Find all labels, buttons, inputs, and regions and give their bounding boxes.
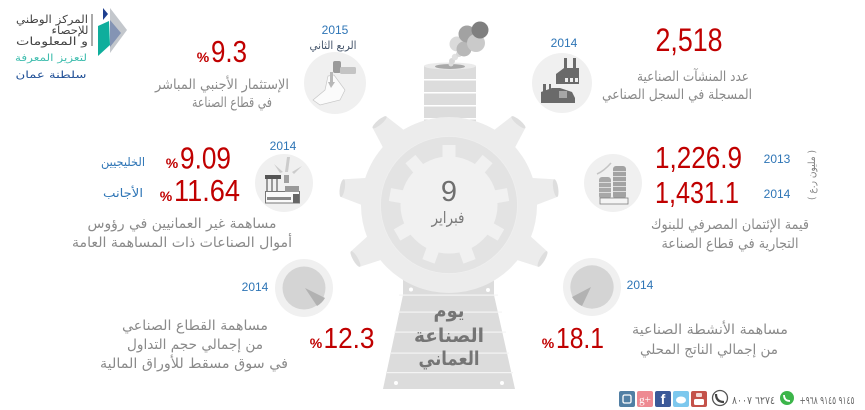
icon: factories — [532, 53, 592, 113]
description: عدد المنشآت الصناعية — [637, 68, 749, 85]
description: من إجمالي الناتج المحلي — [640, 342, 778, 358]
icon: google plus — [637, 391, 653, 407]
unit label: ( مليون ر.ع ) — [807, 150, 818, 200]
description: في سوق مسقط للأوراق المالية — [100, 354, 288, 372]
description — [154, 75, 289, 111]
value: 9.3 — [211, 34, 247, 69]
percent: % — [160, 188, 173, 204]
description — [100, 318, 288, 372]
value 2014: 1,431.1 — [655, 175, 739, 210]
description: قيمة الإئتمان المصرفي للبنوك — [651, 217, 809, 233]
panel: foreign direct investment — [154, 23, 366, 114]
description — [651, 217, 809, 252]
year: 2014 — [627, 278, 654, 292]
icon: factory with coins — [255, 154, 313, 212]
icon: instagram — [619, 391, 635, 407]
year: 2014 — [270, 139, 297, 153]
value: 18.1 — [556, 323, 604, 355]
panel: registered industrial establishments — [532, 22, 752, 113]
panel: trading volume share — [100, 259, 374, 372]
label: foreigners: الأجانب — [103, 185, 143, 200]
value: gulf: 9.09 — [180, 140, 231, 176]
chimney — [424, 62, 476, 128]
logo country: سلطنة عمان — [16, 70, 86, 81]
value: foreign: 11.64 — [174, 173, 240, 208]
year 2014: 2014 — [764, 187, 791, 201]
icon: coin stacks — [584, 154, 642, 212]
icon: facebook: f — [661, 391, 666, 407]
year 2013: 2013 — [764, 152, 791, 166]
footer: contacts and social icons — [619, 390, 855, 407]
year: 2014 — [551, 36, 578, 50]
outer gear — [338, 113, 560, 293]
logo name — [16, 13, 88, 48]
logo name: و المعلومات — [16, 35, 88, 48]
year: 2015 — [322, 23, 349, 37]
icon: google plus: g+ — [639, 394, 651, 406]
phone number: ٨٠٠٧ ٦٢٧٤ — [732, 394, 775, 407]
day title: العماني — [418, 348, 480, 370]
description: مساهمة الأنشطة الصناعية — [632, 320, 788, 338]
description: مساهمة القطاع الصناعي — [122, 318, 268, 334]
logo name: المركز الوطني — [16, 13, 88, 26]
description — [602, 68, 752, 103]
logo: national centre for statistics and information — [15, 8, 127, 81]
description: المسجلة في السجل الصناعي — [602, 87, 752, 103]
date month: فبراير — [431, 208, 464, 228]
description — [72, 216, 292, 251]
icon: youtube — [691, 391, 707, 407]
day title — [414, 300, 484, 370]
icon: facebook — [655, 391, 671, 407]
central gear with chimney and base — [338, 22, 560, 389]
percent: % — [197, 49, 210, 65]
description: التجارية في قطاع الصناعة — [662, 236, 798, 252]
label: gulf nationals: الخليجيين — [101, 155, 145, 170]
logo mark — [98, 8, 127, 56]
base with day title — [383, 278, 515, 389]
description: أموال الصناعات ذات المساهمة العامة — [72, 233, 292, 251]
description: في قطاع الصناعة — [192, 95, 272, 111]
panel: GDP share — [542, 258, 788, 358]
value: 12.3 — [324, 323, 374, 355]
day title: يوم — [434, 300, 464, 322]
value 2013: 1,226.9 — [655, 140, 742, 175]
description: من إجمالي حجم التداول — [127, 337, 263, 353]
logo name: للإحصاء — [52, 24, 88, 37]
panel: non-Omani contribution — [72, 139, 313, 251]
icon: phone — [712, 390, 728, 406]
year: 2014 — [242, 280, 269, 294]
percent: % — [542, 335, 555, 351]
logo slogan: لتعزيز المعرفة — [15, 53, 87, 64]
day title: الصناعة — [414, 325, 484, 347]
icon: Oman map and coins — [304, 52, 366, 114]
date number: 9 — [441, 176, 457, 208]
period: الربع الثاني — [310, 39, 356, 52]
panel: bank credit — [584, 140, 818, 252]
icon: whatsapp — [780, 391, 794, 405]
percent: % — [310, 335, 323, 351]
percent: % — [166, 155, 179, 171]
pie chart — [563, 258, 621, 316]
description — [632, 320, 788, 358]
value: 2,518 — [656, 22, 722, 58]
description: الإستثمار الأجنبي المباشر — [154, 75, 289, 93]
icon: twitter — [673, 391, 689, 407]
pie chart — [275, 259, 333, 317]
description: مساهمة غير العمانيين في رؤوس — [88, 216, 276, 232]
smoke — [448, 22, 488, 66]
